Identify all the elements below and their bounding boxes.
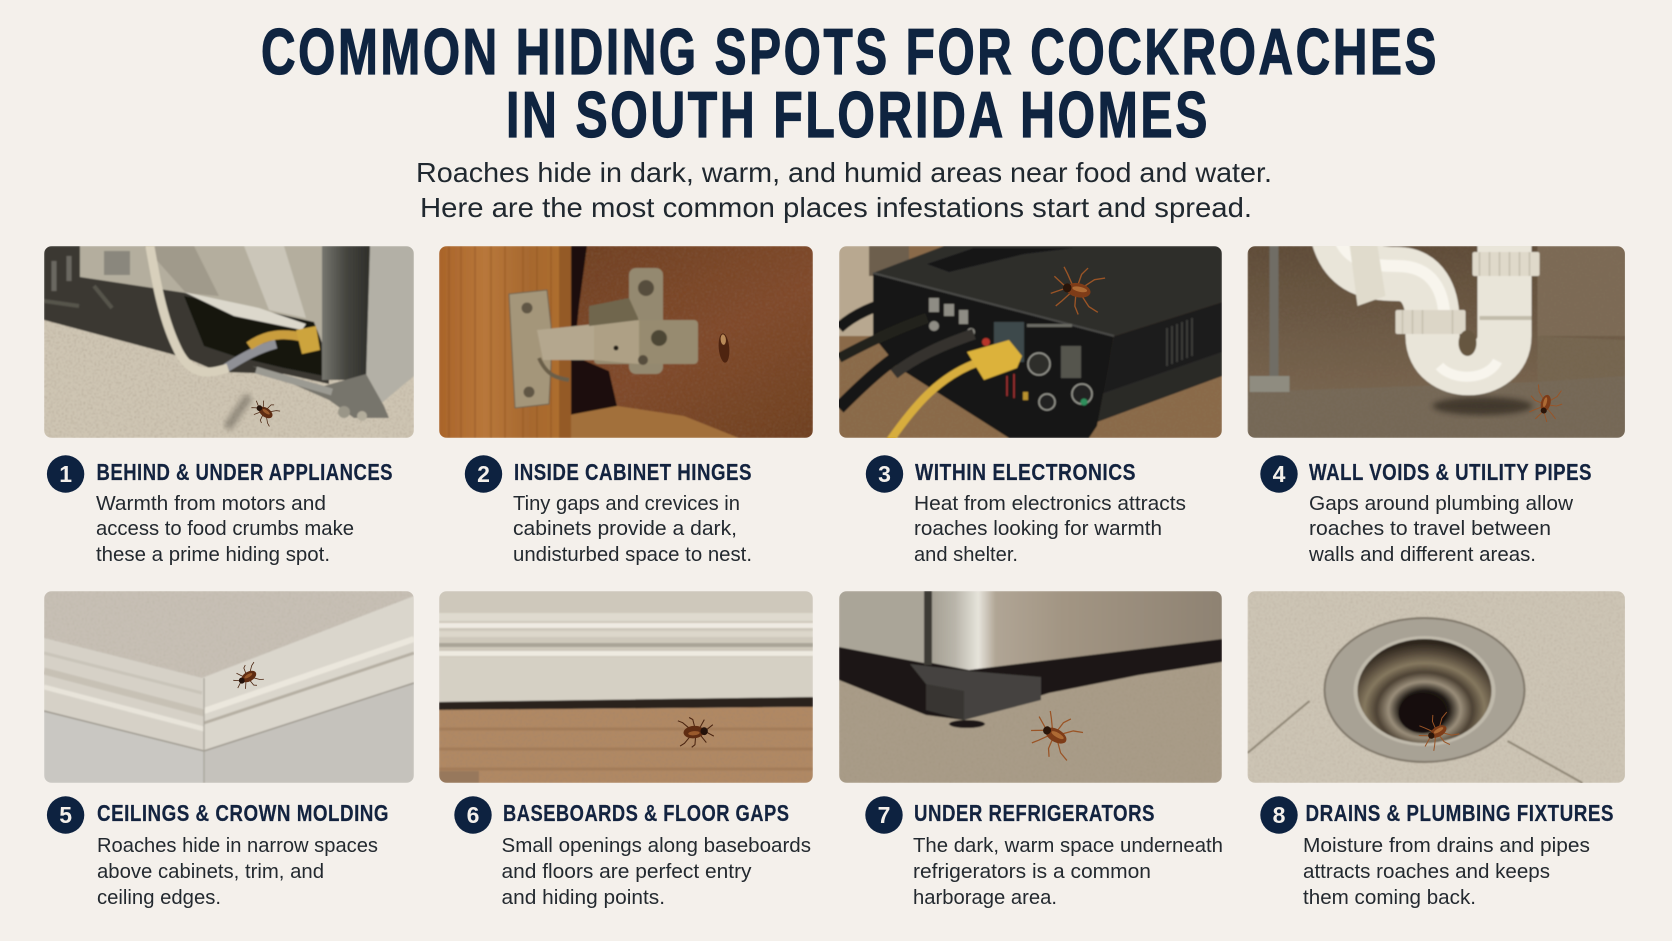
number badge 7: 7 <box>878 802 890 828</box>
photo: baseboard and wood floor <box>439 591 813 783</box>
description: attracts roaches and keeps <box>1303 860 1550 883</box>
panel: inside cabinet hinges <box>439 246 813 566</box>
number badge 4 <box>1260 455 1298 493</box>
number badge 6 <box>454 796 492 834</box>
description: Roaches hide in narrow spaces <box>97 834 378 857</box>
description: refrigerators is a common <box>913 860 1151 883</box>
heading: INSIDE CABINET HINGES <box>514 459 752 485</box>
description: roaches looking for warmth <box>914 517 1162 540</box>
panel: within electronics <box>839 246 1222 566</box>
description: and hiding points. <box>502 886 665 909</box>
panel: ceilings and crown molding <box>44 591 414 909</box>
photo: appliance with hose <box>44 241 414 438</box>
description: walls and different areas. <box>1308 543 1536 566</box>
description: Gaps around plumbing allow <box>1309 492 1573 515</box>
panel: baseboards and floor gaps <box>439 591 813 909</box>
panel: under refrigerators <box>839 591 1223 909</box>
photo: ceiling corner molding <box>44 591 414 783</box>
subtitle <box>416 157 1272 223</box>
photo: electronics box and cables <box>839 246 1222 442</box>
photo: cabinet hinge <box>439 246 813 438</box>
heading: WALL VOIDS & UTILITY PIPES <box>1309 459 1592 485</box>
description: Tiny gaps and crevices in <box>513 492 740 515</box>
description <box>913 834 1223 909</box>
heading: DRAINS & PLUMBING FIXTURES <box>1306 800 1614 826</box>
description: access to food crumbs make <box>96 517 354 540</box>
heading: UNDER REFRIGERATORS <box>914 800 1155 826</box>
panel: drains and plumbing fixtures <box>1248 591 1626 909</box>
description <box>96 492 354 566</box>
number badge 1 <box>47 455 84 493</box>
heading: CEILINGS & CROWN MOLDING <box>97 800 389 826</box>
number badge 5: 5 <box>59 802 72 828</box>
number badge 2 <box>465 455 502 493</box>
panel: behind and under appliances <box>44 241 414 566</box>
description <box>914 492 1186 566</box>
number badge 5 <box>47 796 84 834</box>
description: cabinets provide a dark, <box>513 517 737 540</box>
heading: WITHIN ELECTRONICS <box>915 459 1136 485</box>
description: harborage area. <box>913 886 1057 909</box>
description <box>1308 492 1573 566</box>
description: above cabinets, trim, and <box>97 860 324 883</box>
heading: BASEBOARDS & FLOOR GAPS <box>503 800 790 826</box>
number badge 2: 2 <box>477 461 490 487</box>
description: and shelter. <box>914 543 1018 566</box>
title <box>261 15 1439 151</box>
photo: floor drain <box>1248 591 1626 783</box>
description: undisturbed space to nest. <box>513 543 752 566</box>
description: these a prime hiding spot. <box>96 543 330 566</box>
number badge 6: 6 <box>467 802 479 828</box>
number badge 8 <box>1260 796 1298 834</box>
description: them coming back. <box>1303 886 1476 909</box>
description: Moisture from drains and pipes <box>1303 834 1590 857</box>
description <box>1303 834 1590 909</box>
description: Warmth from motors and <box>96 492 326 515</box>
panel: wall voids and utility pipes <box>1248 226 1626 566</box>
subtitle: Here are the most common places infestations start and spread. <box>420 192 1252 223</box>
number badge 8: 8 <box>1273 802 1286 828</box>
description <box>97 834 378 909</box>
description: Small openings along baseboards <box>502 834 811 857</box>
description: The dark, warm space underneath <box>913 834 1223 857</box>
title: IN SOUTH FLORIDA HOMES <box>506 78 1210 151</box>
number badge 1: 1 <box>59 461 72 487</box>
description: roaches to travel between <box>1309 517 1551 540</box>
description <box>502 834 811 909</box>
photo: white P-trap pipe <box>1248 226 1626 438</box>
photo: refrigerator foot <box>839 591 1222 783</box>
number badge 3 <box>866 455 903 493</box>
number badge 7 <box>865 796 903 834</box>
description: Heat from electronics attracts <box>914 492 1186 515</box>
description: ceiling edges. <box>97 886 221 909</box>
description: and floors are perfect entry <box>502 860 752 883</box>
subtitle: Roaches hide in dark, warm, and humid areas near food and water. <box>416 157 1272 188</box>
heading: BEHIND & UNDER APPLIANCES <box>96 459 393 485</box>
number badge 3: 3 <box>878 461 891 487</box>
number badge 4: 4 <box>1273 461 1286 487</box>
description <box>513 492 752 566</box>
